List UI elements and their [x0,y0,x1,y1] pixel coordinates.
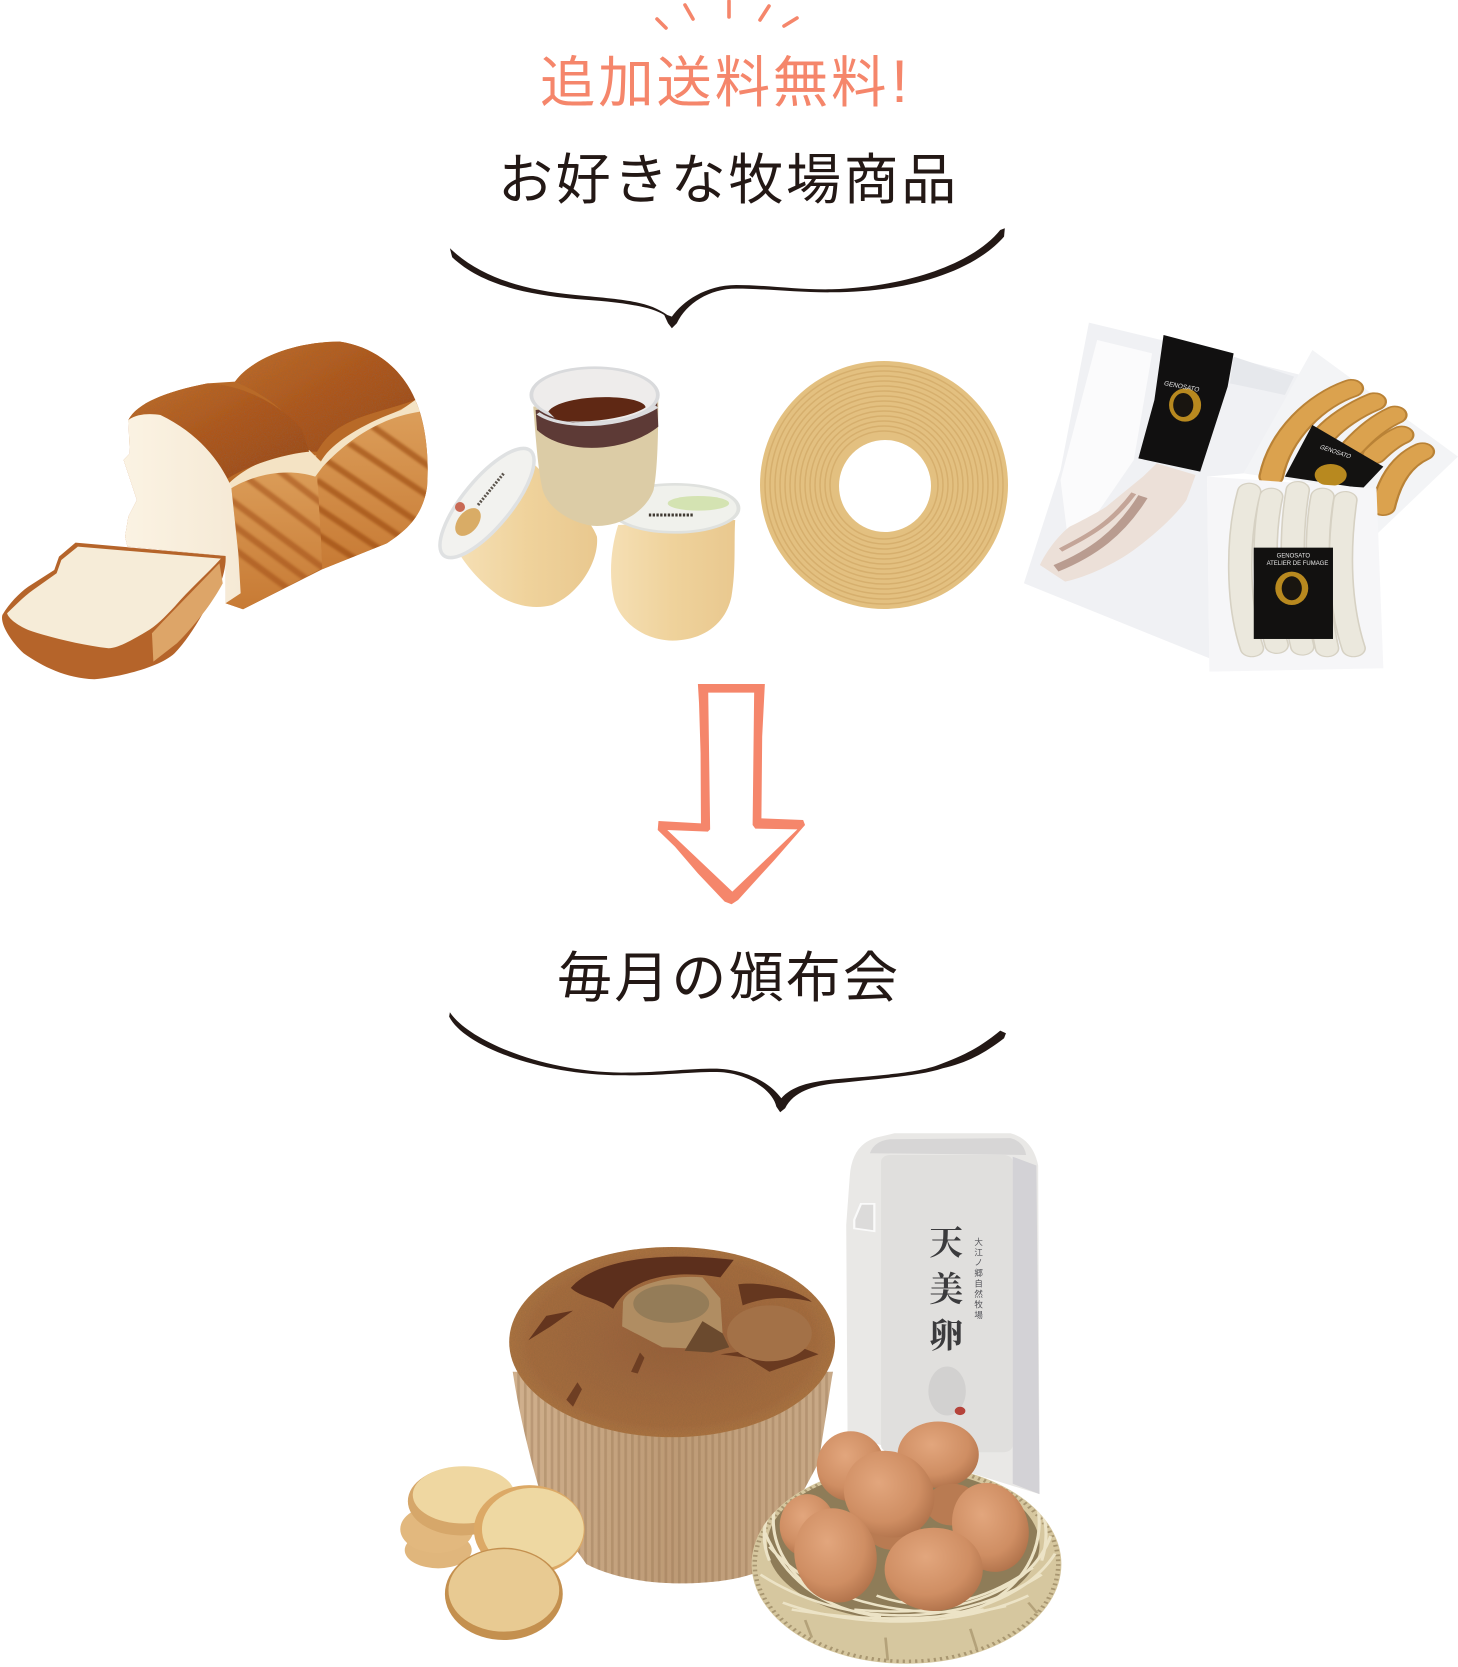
carton brand line: 大 [974,1237,983,1247]
back loaf crust [235,342,415,452]
brace: lower [449,1012,1006,1112]
photo: egg carton [846,1133,1040,1494]
front loaf crust [128,383,309,481]
paper tube [622,1277,723,1349]
carton brand line: 自 [974,1278,983,1288]
frankfurter bag: GENOSATO [1318,444,1353,460]
left cup lid [425,435,549,571]
brace: upper [450,228,1005,328]
slice side [152,563,223,662]
carton brand line: 郷 [974,1268,983,1278]
photo: three pudding cups [425,368,739,641]
crumb band between crust and side [229,400,420,488]
straw nest [760,1510,1056,1623]
loaf side stripes [232,472,322,589]
photo: egg carton: 卵 [929,1317,963,1355]
left cup body [460,463,597,607]
slice face [7,547,221,648]
heading: favourite ranch products: お好きな牧場商品 [498,149,959,211]
photo: eggs in a bamboo basket [752,1421,1061,1664]
right cup [611,484,739,641]
corrugated paper wrapper [513,1372,833,1583]
bacon label [1138,335,1234,472]
photo: vacuum packed meats [1024,323,1458,672]
basket [752,1464,1061,1664]
photo: egg carton: 美 [929,1271,963,1309]
basket rim weave [805,1603,1037,1660]
bacon label: GENOSATO [1163,380,1200,394]
loaf silhouette [124,342,428,609]
carton egg mark and seal [928,1367,966,1415]
white sausage bag: GENOSATO [1277,553,1310,559]
bacon slice [1040,463,1196,582]
loaf side panels [316,402,428,569]
bacon bag [1024,323,1301,658]
eggs [898,1421,979,1488]
photo: baumkuchen ring [760,361,1008,609]
photo: chiffon cake [509,1247,835,1583]
photo: sliced bread loaf [2,342,439,679]
heading: free additional shipping: 追加送料無料! [540,48,911,115]
top cup with caramel [531,368,658,526]
carton calligraphy: 天 [929,1226,963,1263]
white sausage bag [1207,477,1383,672]
cut face [124,414,241,603]
carton brand line: 然 [974,1289,983,1299]
carton brand line: 牧 [974,1299,983,1309]
cake top [509,1247,835,1437]
frankfurter bag [1244,350,1458,537]
heading: monthly subscription: 毎月の頒布会 [557,947,900,1009]
carton brand line [974,1237,983,1320]
carton brand line: 江 [974,1248,983,1258]
arrow [658,684,805,904]
white sausage bag: ATELIER DE FUMAGE [1267,561,1328,567]
baumkuchen growth rings [765,366,1003,604]
dark cracks [571,1257,734,1309]
photo: butter cookies [400,1466,585,1640]
carton brand line: ノ [974,1257,983,1267]
slice crust [2,543,226,679]
right cup and top cup [531,368,739,641]
sparkle rays [657,1,797,28]
carton brand line: 場 [974,1310,983,1320]
